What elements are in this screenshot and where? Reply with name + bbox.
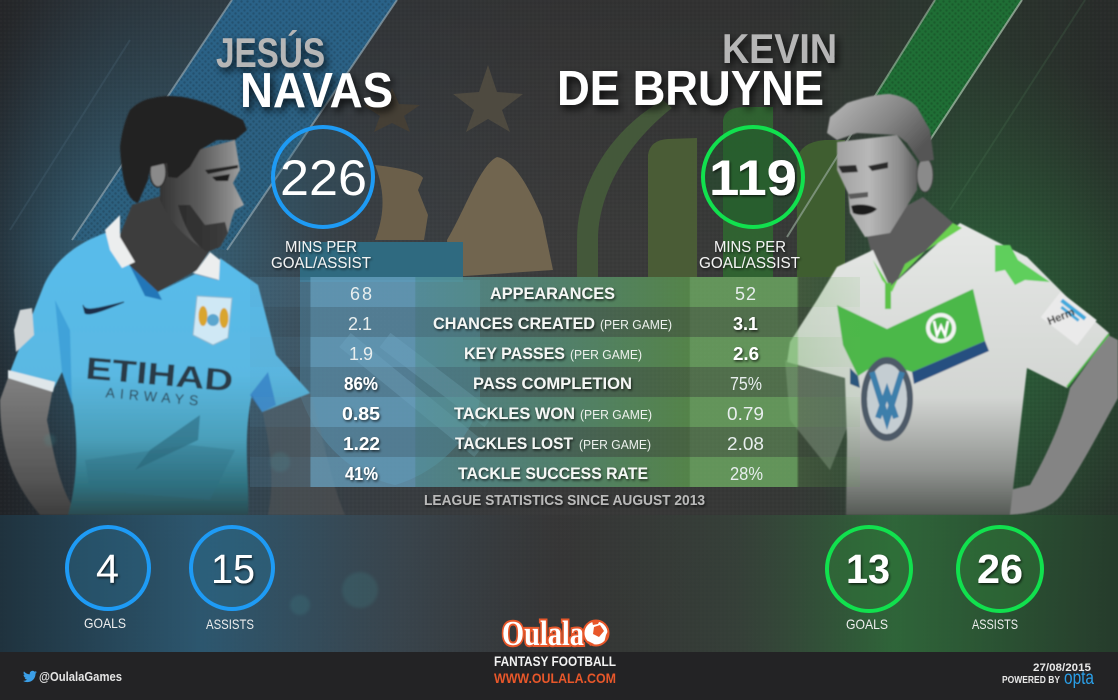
row: tackle success rate: TACKLE SUCCESS RATE [458, 464, 648, 483]
row: appearances: 68 [350, 284, 372, 304]
placket [885, 283, 891, 309]
row: key passes: 2.6 [733, 344, 759, 364]
row: tackles won: 0.79 [727, 404, 764, 424]
name: Jesús Navas [216, 28, 393, 118]
row: tackle success rate: 41% [345, 464, 378, 484]
stat circle: Navas assists: 15 [211, 546, 255, 592]
player: Kevin De Bruyne [785, 94, 1118, 515]
Navas shirt folds [250, 372, 276, 412]
Navas eye [212, 174, 230, 181]
stat circle: De Bruyne goals [827, 527, 911, 632]
caption: Navas mins per goal/assist: GOAL/ASSIST [271, 255, 371, 272]
name: Kevin De Bruyne [557, 25, 837, 116]
Navas left arm [0, 378, 78, 515]
date: 27/08/2015 [1033, 662, 1091, 674]
stat circle: Navas assists [191, 527, 273, 632]
blue diagonal stripe [10, 0, 397, 250]
row: pass completion [344, 374, 762, 394]
row: tackles won: (PER GAME) [580, 407, 652, 422]
row: chances created [348, 314, 758, 334]
Navas hair [120, 96, 247, 203]
Navas sleeve badge [14, 308, 34, 352]
table footnote: LEAGUE STATISTICS SINCE AUGUST 2013 [424, 493, 705, 509]
row: key passes: 1.9 [349, 344, 373, 364]
name: Kevin De Bruyne: DE BRUYNE [557, 62, 824, 116]
stat circle: Navas assists: ASSISTS [206, 616, 254, 632]
icon: twitter bird [23, 671, 37, 682]
bokeh lights [44, 434, 378, 615]
row: tackles lost: 1.22 [343, 434, 380, 454]
De Bruyne face [837, 135, 917, 237]
row: appearances [350, 284, 756, 304]
footer strip [0, 652, 1118, 700]
caption: De Bruyne mins per goal/assist: GOAL/ASSIST [699, 255, 800, 272]
row: chances created: CHANCES CREATED [433, 314, 595, 333]
Etihad sponsor: AIRWAYS [105, 384, 199, 408]
row: chances created: (PER GAME) [600, 317, 672, 332]
De Bruyne shirt [787, 223, 1109, 515]
Navas face [160, 140, 244, 252]
De Bruyne neck [867, 197, 953, 287]
Kappa logo [995, 245, 1050, 285]
caption: De Bruyne mins per goal/assist: MINS PER [714, 239, 786, 256]
Nike swoosh [83, 302, 124, 314]
row: tackles won [342, 404, 764, 424]
name: Jesús Navas: JESÚS [216, 28, 325, 76]
Navas shirt [8, 232, 310, 515]
caption: De Bruyne mins per goal/assist [699, 239, 800, 272]
row: chances created: 3.1 [733, 314, 758, 334]
Fantasy Football tagline: FANTASY FOOTBALL [494, 654, 616, 669]
website: WWW.OULALA.COM [494, 671, 616, 686]
row: pass completion: PASS COMPLETION [473, 374, 632, 393]
caption: Navas mins per goal/assist: MINS PER [285, 239, 357, 256]
row: tackle success rate [345, 464, 763, 484]
row: tackles lost: (PER GAME) [579, 437, 651, 452]
name: Kevin De Bruyne: KEVIN [722, 25, 837, 72]
Navas ear [150, 157, 166, 187]
stat circle: Navas goals [67, 527, 149, 631]
stat circle: De Bruyne assists: 26 [977, 546, 1023, 592]
stat circle: Navas 226 [273, 127, 373, 227]
Navas sleeve cuff [8, 370, 55, 392]
row: pass completion: 75% [730, 374, 762, 394]
row: pass completion: 86% [344, 374, 378, 394]
Navas neck [120, 190, 210, 292]
Etihad sponsor [83, 351, 235, 411]
row: tackles lost: TACKLES LOST [455, 434, 574, 453]
row: tackles lost: 2.08 [727, 434, 764, 454]
stat circle: De Bruyne assists: ASSISTS [972, 616, 1018, 632]
row: tackles won: TACKLES WON [454, 404, 575, 423]
Bundesliga sleeve patch: Herm [1046, 306, 1077, 328]
De Bruyne collar trim [873, 223, 962, 292]
stat circle: De Bruyne assists [958, 527, 1042, 632]
row: tackle success rate: 28% [730, 464, 763, 484]
De Bruyne chest stripe [850, 341, 989, 388]
bottom band [0, 515, 1118, 652]
De Bruyne hair [827, 94, 934, 162]
stat circle: De Bruyne 119: 119 [709, 150, 797, 206]
row: tackles won: 0.85 [342, 404, 380, 424]
Navas collar [105, 215, 135, 268]
row: tackles lost [343, 434, 764, 454]
VW logo [861, 357, 913, 441]
Bundesliga sleeve patch [1039, 292, 1097, 347]
De Bruyne eyes and mouth [838, 162, 888, 215]
De Bruyne ear [917, 158, 933, 192]
Oulala logo: Oulala [502, 614, 584, 653]
faint Wolfsburg crest [577, 100, 845, 277]
row: key passes: (PER GAME) [570, 347, 642, 362]
De Bruyne right arm [990, 335, 1118, 515]
powered by opta: POWERED BY [1002, 674, 1060, 686]
row: appearances: 52 [735, 284, 756, 304]
row: appearances: APPEARANCES [490, 284, 615, 303]
twitter handle: @OulalaGames [39, 669, 122, 684]
row: key passes [349, 344, 759, 364]
row: key passes: KEY PASSES [464, 344, 565, 363]
Man City badge on shirt [193, 296, 232, 345]
stat circle: Navas goals: GOALS [84, 615, 126, 631]
Navas right arm [262, 392, 345, 515]
powered by opta [1002, 668, 1094, 689]
name: Jesús Navas: NAVAS [240, 64, 393, 118]
green diagonal stripe [787, 0, 1085, 237]
Wolfsburg badge [926, 313, 956, 343]
stat circle: De Bruyne 119 [703, 127, 803, 227]
row: chances created: 2.1 [348, 314, 372, 334]
Navas beard [178, 205, 228, 252]
stat circle: De Bruyne goals: GOALS [846, 616, 888, 632]
player: Jesús Navas [0, 96, 345, 515]
sleeve trim [1067, 334, 1109, 387]
stats table [250, 277, 860, 487]
stat circle: Navas goals: 4 [96, 546, 119, 592]
Etihad sponsor: ETIHAD [84, 351, 235, 398]
De Bruyne left arm [785, 360, 850, 470]
De Bruyne chest band [837, 289, 985, 376]
faint Manchester City crest [300, 65, 553, 485]
stat circle: De Bruyne goals: 13 [846, 546, 890, 592]
powered by opta: opta [1064, 668, 1094, 689]
stat circle: Navas 226: 226 [280, 150, 367, 206]
caption: Navas mins per goal/assist [271, 239, 371, 272]
